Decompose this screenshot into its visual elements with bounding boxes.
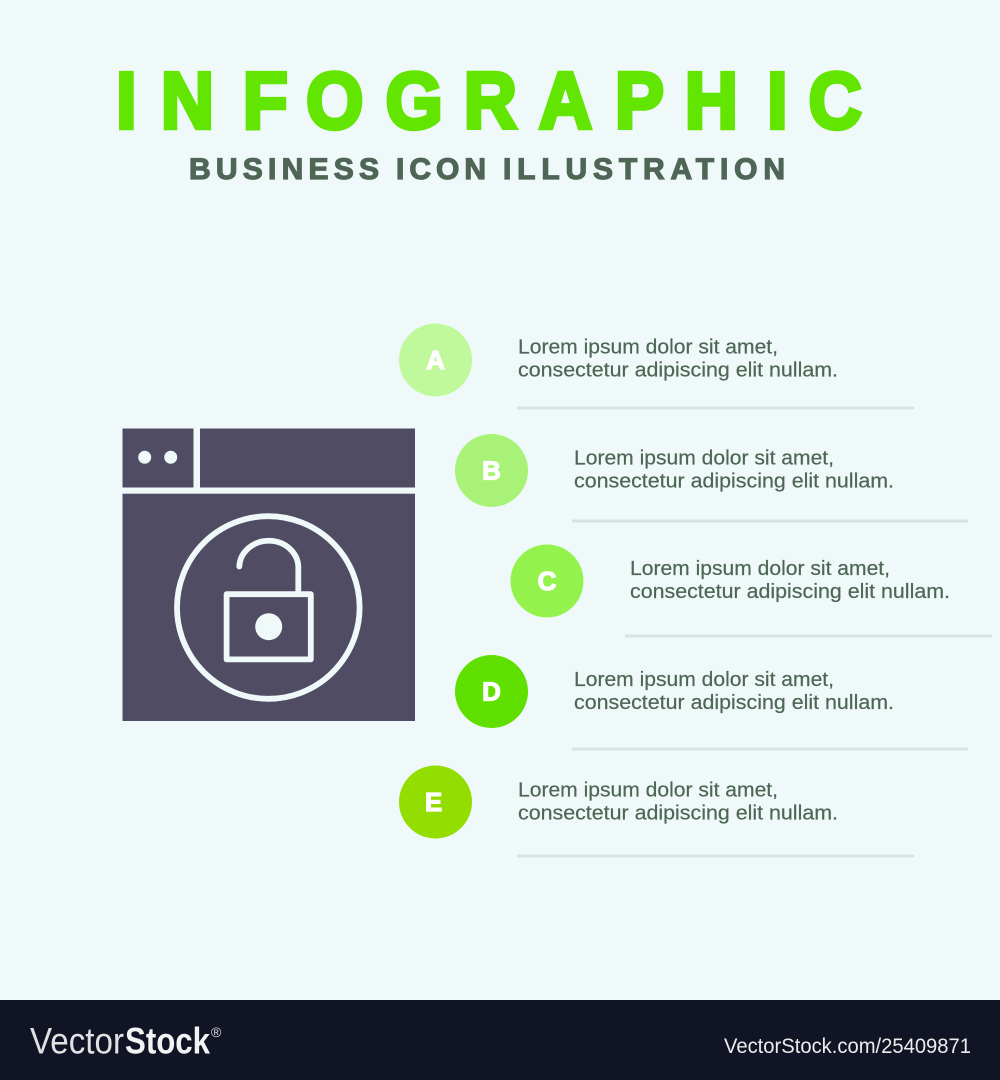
- step B: Lorem ipsum dolor sit amet,: [574, 448, 834, 470]
- step B: consectetur adipiscing elit nullam.: [574, 470, 894, 492]
- step C: consectetur adipiscing elit nullam.: [630, 581, 950, 603]
- step D: consectetur adipiscing elit nullam.: [574, 692, 894, 714]
- footer logo: Stock: [125, 1020, 210, 1062]
- footer logo: Vector: [30, 1020, 124, 1062]
- footer bar: [0, 1000, 1000, 1080]
- step E: [399, 766, 914, 858]
- step A: [399, 324, 914, 410]
- step E: Lorem ipsum dolor sit amet,: [518, 780, 778, 802]
- subtitle: ILLUSTRATION: [503, 153, 785, 186]
- step B: [455, 434, 968, 522]
- title: INFOGRAPHIC: [116, 56, 862, 146]
- footer logo: ®: [211, 1024, 222, 1040]
- footer logo: [30, 1020, 222, 1062]
- step A: A: [426, 345, 445, 375]
- step A: consectetur adipiscing elit nullam.: [518, 360, 838, 382]
- subtitle: BUSINESS: [189, 153, 379, 186]
- subtitle: [189, 153, 785, 186]
- step C: C: [538, 566, 557, 596]
- step D: D: [482, 677, 501, 707]
- step E: consectetur adipiscing elit nullam.: [518, 802, 838, 824]
- step B: B: [482, 456, 501, 486]
- step E: E: [425, 787, 442, 817]
- subtitle: ICON: [396, 153, 486, 186]
- icon: browser window with open padlock: [122, 428, 415, 721]
- step C: [510, 544, 992, 638]
- footer image id: VectorStock.com/25409871: [724, 1035, 971, 1058]
- step D: Lorem ipsum dolor sit amet,: [574, 669, 834, 691]
- step A: Lorem ipsum dolor sit amet,: [518, 336, 778, 358]
- step D: [455, 655, 968, 750]
- step C: Lorem ipsum dolor sit amet,: [630, 558, 890, 580]
